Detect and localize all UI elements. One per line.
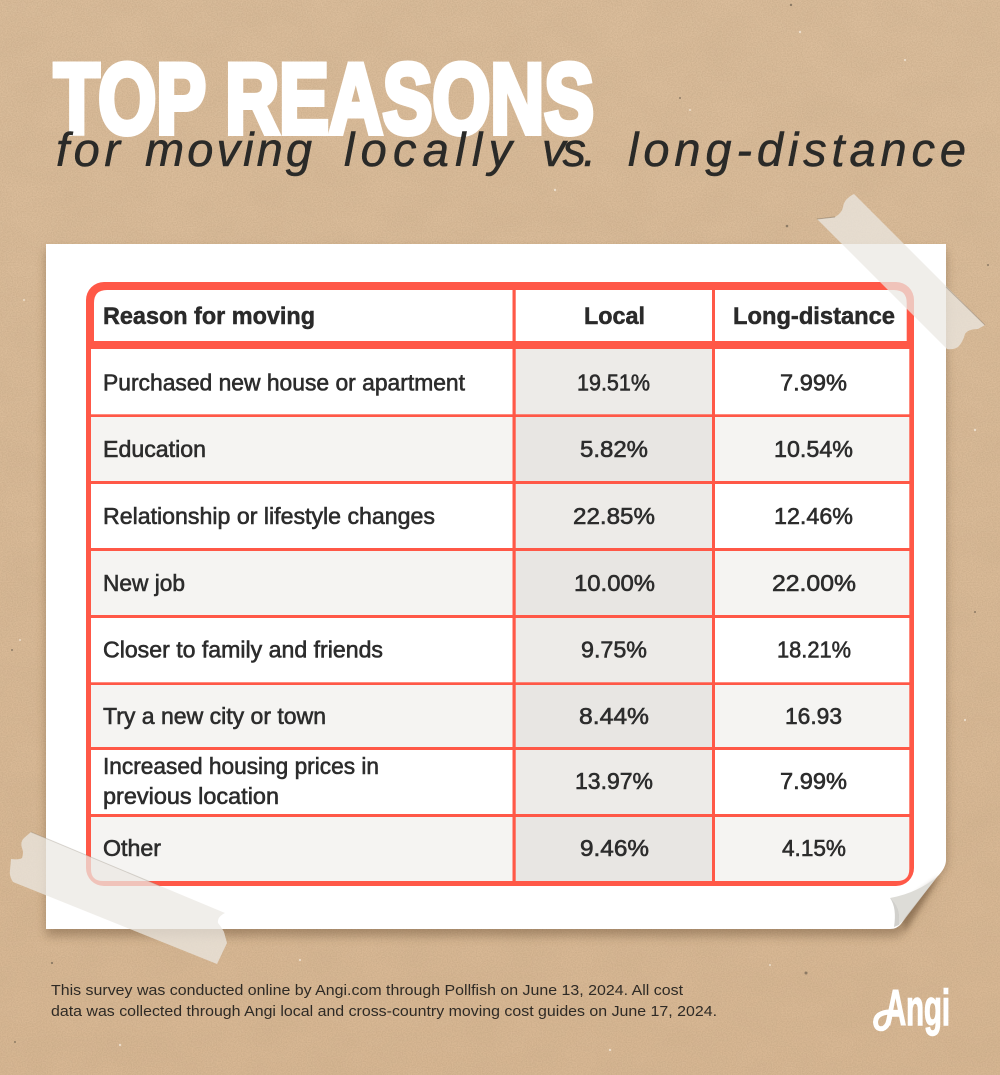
table frame	[86, 282, 914, 886]
tape: bottom left	[10, 832, 227, 964]
row: closer to family	[91, 618, 909, 682]
row: education: 5.82%	[580, 436, 648, 462]
curled corner fold	[890, 876, 940, 932]
paper sheet with curled corner	[46, 244, 946, 936]
row: increased housing prices: 13.97%	[575, 768, 653, 794]
logo: Angi	[876, 980, 950, 1036]
row: purchased new house: Purchased new house or apartment	[103, 370, 466, 396]
subtitle: handwritten line	[56, 123, 966, 176]
row: new job	[91, 551, 909, 615]
row: new job: New job	[103, 570, 185, 596]
header row: Local	[584, 303, 645, 330]
row: closer to family: 9.75%	[581, 636, 647, 662]
row: education	[91, 417, 909, 481]
footnote	[51, 983, 717, 1020]
row: try a new city	[91, 685, 909, 747]
row: relationship or lifestyle: 12.46%	[774, 503, 853, 529]
row: other: 9.46%	[580, 835, 649, 861]
table	[86, 282, 914, 886]
row: relationship or lifestyle: 22.85%	[573, 503, 655, 529]
row: increased housing prices: 7.99%	[780, 768, 847, 794]
row: education: 10.54%	[774, 436, 853, 462]
row: closer to family: Closer to family and friends	[103, 636, 383, 662]
row: try a new city: 8.44%	[579, 703, 649, 729]
subtitle: handwritten line: moving	[145, 123, 312, 176]
row: other	[91, 817, 909, 881]
row: increased housing prices: Increased housing prices in	[103, 753, 379, 779]
header row: Reason for moving	[103, 303, 315, 330]
subtitle: handwritten line: locally	[344, 123, 514, 176]
row: closer to family: 18.21%	[777, 636, 851, 662]
title: top reasons: TOP REASONS	[54, 43, 594, 154]
subtitle: handwritten line: vs.	[542, 123, 596, 176]
row: relationship or lifestyle	[91, 484, 909, 548]
row: purchased new house	[91, 349, 909, 414]
logo: Angi: Angi	[885, 980, 950, 1036]
row: other: Other	[103, 835, 161, 861]
row: try a new city: Try a new city or town	[103, 703, 326, 729]
header row	[94, 290, 907, 341]
row: try a new city: 16.93	[785, 703, 842, 729]
subtitle: handwritten line: long-distance	[628, 123, 966, 176]
footnote: data was collected through Angi local and cross-country moving cost guides on June 17, 2024.	[51, 1004, 717, 1020]
row: new job: 22.00%	[772, 570, 856, 596]
footnote: This survey was conducted online by Angi.com through Pollfish on June 13, 2024. All cost	[51, 983, 683, 999]
row: other: 4.15%	[782, 835, 846, 861]
row: purchased new house: 7.99%	[780, 370, 847, 396]
subtitle: handwritten line: for	[56, 123, 122, 176]
header row: Long-distance	[733, 303, 895, 330]
row: new job: 10.00%	[574, 570, 655, 596]
row: increased housing prices	[91, 750, 909, 814]
row: relationship or lifestyle: Relationship or lifestyle changes	[103, 503, 435, 529]
row: increased housing prices: previous location	[103, 783, 279, 809]
row: purchased new house: 19.51%	[577, 370, 650, 396]
row: education: Education	[103, 436, 206, 462]
tape: top right	[817, 194, 985, 349]
